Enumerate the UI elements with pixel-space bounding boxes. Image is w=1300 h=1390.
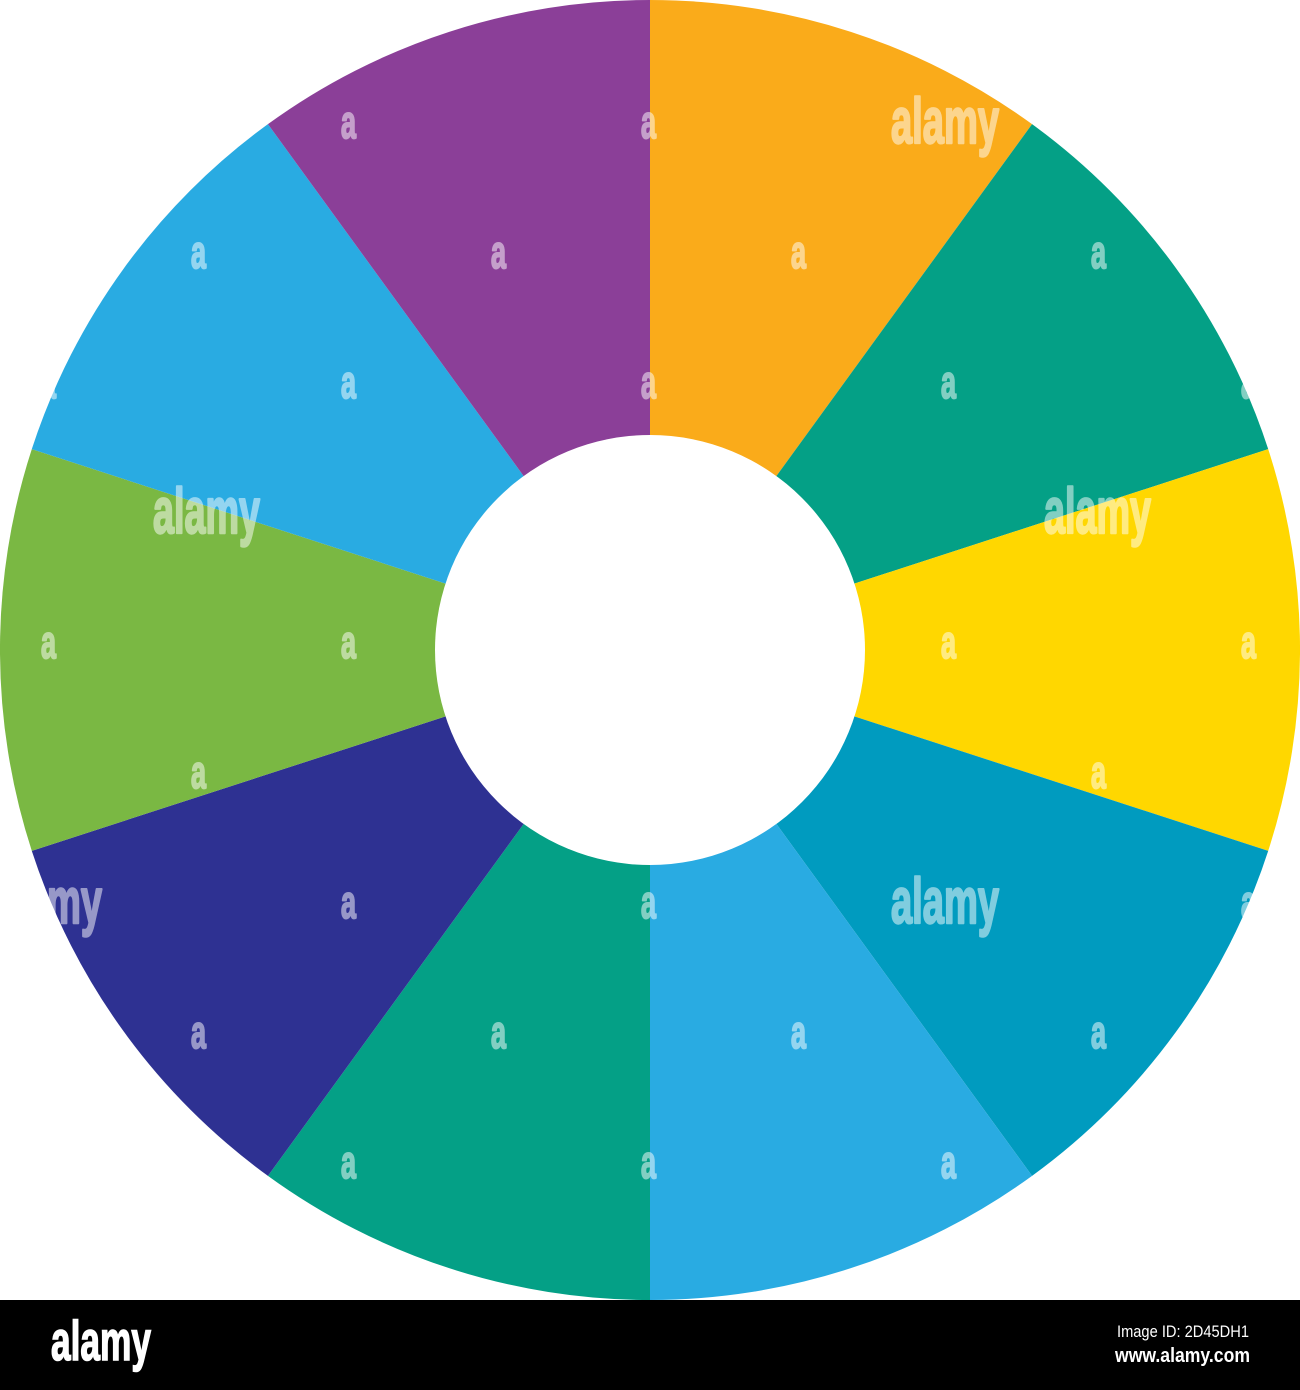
watermarks: a [791,226,806,278]
watermarks: a [641,356,656,408]
watermarks: a [1091,746,1106,798]
watermarks: alamy [891,865,999,937]
watermarks: a [491,226,506,278]
segment: sky blue lower [650,650,1032,1300]
segment: teal blue [650,650,1268,1176]
watermarks: a [1241,616,1256,668]
watermarks: a [641,876,656,928]
watermarks: a [641,1136,656,1188]
watermarks: a [941,356,956,408]
watermarks: a [191,746,206,798]
centre hole [435,435,865,865]
watermarks: a [941,616,956,668]
watermarks: a [191,1006,206,1058]
footer bar [0,1300,1300,1390]
watermarks: a [341,96,356,148]
segment: sky blue upper [32,124,650,650]
watermarks: alamy [1044,475,1151,547]
watermarks: a [1241,356,1256,408]
watermarks: a [641,96,656,148]
watermarks: a [491,1006,506,1058]
watermarks [0,85,1256,1188]
website: www.alamy.com [1114,1345,1250,1367]
watermarks: a [1091,226,1106,278]
segment: lime green [0,449,650,851]
watermarks: a [341,616,356,668]
footer logo: alamy [51,1309,151,1372]
watermarks: a [791,1006,806,1058]
segment: purple [268,0,650,650]
watermarks: alamy [153,475,260,547]
segment: yellow [650,449,1300,851]
segment: green bottom [268,650,650,1300]
segment: orange [650,0,1032,650]
watermarks: a [191,226,206,278]
watermarks: a [341,876,356,928]
watermarks: a [41,616,56,668]
watermarks: a [1091,1006,1106,1058]
segment: dark blue [32,650,650,1176]
watermarks: a [341,1136,356,1188]
image id: Image ID: 2D45DH1 [1117,1322,1249,1341]
segment: green upper right [650,124,1268,650]
watermarks: a [41,356,56,408]
watermarks: alamy [891,85,999,157]
watermarks: a [1241,876,1256,928]
watermarks: a [341,356,356,408]
watermarks: a [941,1136,956,1188]
